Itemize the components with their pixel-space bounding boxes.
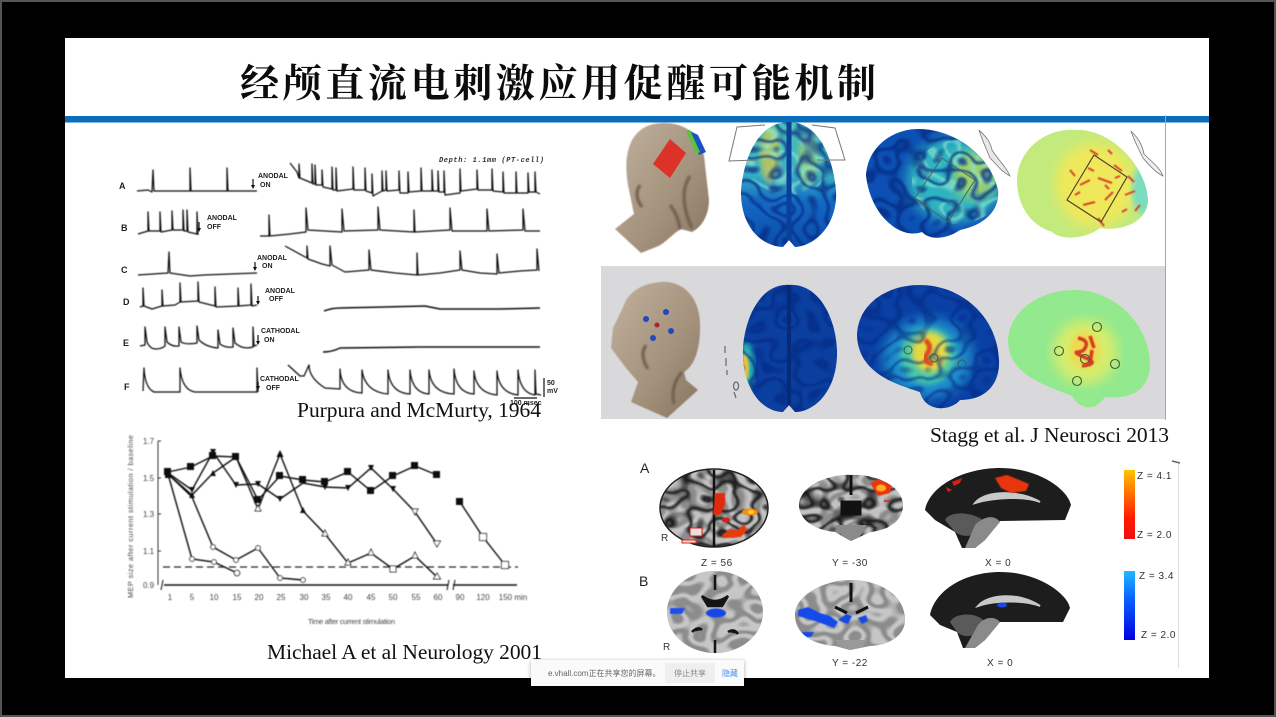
scale bar [510, 378, 558, 407]
caption: Stagg: Stagg et al. J Neurosci 2013 [930, 423, 1169, 447]
panel divider line [1164, 115, 1166, 420]
stimulus labels: OFF [207, 224, 222, 231]
stimulus labels: ANODAL [258, 173, 289, 180]
stimulus labels: CATHODAL [261, 328, 300, 335]
screen sharing notification [531, 660, 744, 686]
baseline dashed [163, 566, 518, 568]
caption: Michael: Michael A et al Neurology 2001 [267, 640, 542, 664]
MRI axial B [667, 571, 763, 653]
view labels row A: Y = -30 [832, 558, 868, 569]
view labels row A: X = 0 [985, 558, 1011, 569]
colour bar hot [1124, 470, 1172, 541]
stop sharing button [665, 663, 715, 683]
icon: brain current-density map [1017, 130, 1164, 238]
row letters [119, 181, 130, 392]
icon: head with electrode [615, 123, 709, 253]
R label A: R [661, 533, 669, 544]
panel: intracellular traces [119, 157, 558, 407]
row label B: B [639, 573, 648, 589]
colour bar cold [1124, 571, 1176, 641]
panel: fMRI activation [639, 460, 1180, 669]
colour bar hot: Z = 4.1 [1137, 471, 1172, 482]
stimulus labels: OFF [269, 296, 284, 303]
caption: Purpura: Purpura and McMurty, 1964 [297, 398, 541, 422]
view labels row B [832, 658, 1013, 669]
stimulus labels: ANODAL [207, 215, 238, 222]
stimulus labels: ON [264, 337, 274, 344]
notification box [531, 660, 744, 686]
triangle markers [189, 449, 396, 513]
x axis: 150 min [499, 593, 527, 602]
colour bar hot: Z = 2.0 [1137, 530, 1172, 541]
open square markers [390, 534, 508, 572]
trace rows [137, 163, 541, 395]
panel: MEP line chart [126, 435, 527, 626]
x axis: 5 [190, 593, 195, 602]
series lines [168, 452, 505, 580]
x axis: 35 [322, 593, 331, 602]
icon: brain top view field [729, 118, 845, 253]
x axis: 10 [210, 593, 219, 602]
icon: head with electrodes [611, 282, 700, 418]
y axis [126, 435, 161, 598]
view labels row A: Z = 56 [701, 558, 733, 569]
open triangle markers [255, 505, 440, 579]
colour bar cold: Z = 2.0 [1141, 630, 1176, 641]
row label A: A [640, 460, 650, 476]
scale bar: 100 msec [510, 400, 542, 407]
x axis [161, 580, 527, 626]
x axis: 1 [168, 593, 173, 602]
icon: brain side view field [857, 285, 1000, 408]
x axis: 20 [255, 593, 264, 602]
y axis: 0.9 [143, 581, 155, 590]
y axis: 1.3 [143, 510, 155, 519]
view labels row B: Y = -22 [832, 658, 868, 669]
x axis: Time after current stimulation [308, 617, 395, 626]
stimulus labels: OFF [266, 385, 281, 392]
stimulus labels: ANODAL [257, 255, 288, 262]
depth label: Depth: 1.1mm (PT-cell) [439, 157, 544, 165]
x axis: 55 [412, 593, 421, 602]
icon: brain side view field [866, 129, 1011, 238]
open circle markers [190, 545, 305, 582]
y axis: MEP size after current stimulation / baseline [126, 435, 135, 598]
icon: brain current-density map [1008, 290, 1150, 408]
stimulus labels: ON [260, 182, 270, 189]
MRI coronal B [795, 580, 905, 650]
stimulus arrows [197, 179, 260, 390]
x axis: 120 [476, 593, 490, 602]
title: 经颅直流电刺激应用促醒可能机制 [240, 63, 876, 106]
MRI axial A [659, 468, 769, 548]
panel: anodal tDCS head model row [615, 118, 1163, 253]
MRI sagittal A [925, 468, 1071, 548]
colour bar cold: Z = 3.4 [1139, 571, 1174, 582]
row letters: A [119, 181, 126, 191]
hide link: 隐藏 [722, 668, 738, 678]
view labels row B: X = 0 [987, 658, 1013, 669]
notification text: e.vhall.com正在共享您的屏幕。 [548, 668, 660, 678]
x axis: 90 [456, 593, 465, 602]
grey panel behind lower model row [601, 266, 1165, 419]
view labels row A [701, 558, 1011, 569]
icon: brain top view field [725, 280, 842, 415]
x axis: 30 [300, 593, 309, 602]
filled square markers [164, 452, 463, 505]
stimulus labels [207, 173, 300, 392]
row letters: C [121, 265, 128, 275]
scale bar: 50 [547, 380, 555, 387]
y axis: 1.7 [143, 437, 155, 446]
stimulus labels: CATHODAL [260, 376, 299, 383]
x axis: 60 [434, 593, 443, 602]
R label B: R [663, 642, 671, 653]
x axis: 40 [344, 593, 353, 602]
row letters: D [123, 297, 130, 307]
x axis: 15 [233, 593, 242, 602]
y axis: 1.1 [143, 547, 155, 556]
stop sharing button: 停止共享 [674, 668, 706, 678]
x axis: 45 [367, 593, 376, 602]
blue title rule [65, 116, 1209, 122]
row letters: F [124, 382, 130, 392]
MRI sagittal B [930, 572, 1070, 648]
y axis: 1.5 [143, 474, 155, 483]
row letters: E [123, 338, 129, 348]
stimulus labels: ANODAL [265, 288, 296, 295]
scale bar: mV [547, 388, 558, 395]
row letters: B [121, 223, 128, 233]
x axis: 25 [277, 593, 286, 602]
MRI coronal A [799, 474, 903, 541]
stimulus labels: ON [262, 263, 272, 270]
panel: HD-tDCS head model row [611, 280, 1154, 418]
x axis: 50 [389, 593, 398, 602]
